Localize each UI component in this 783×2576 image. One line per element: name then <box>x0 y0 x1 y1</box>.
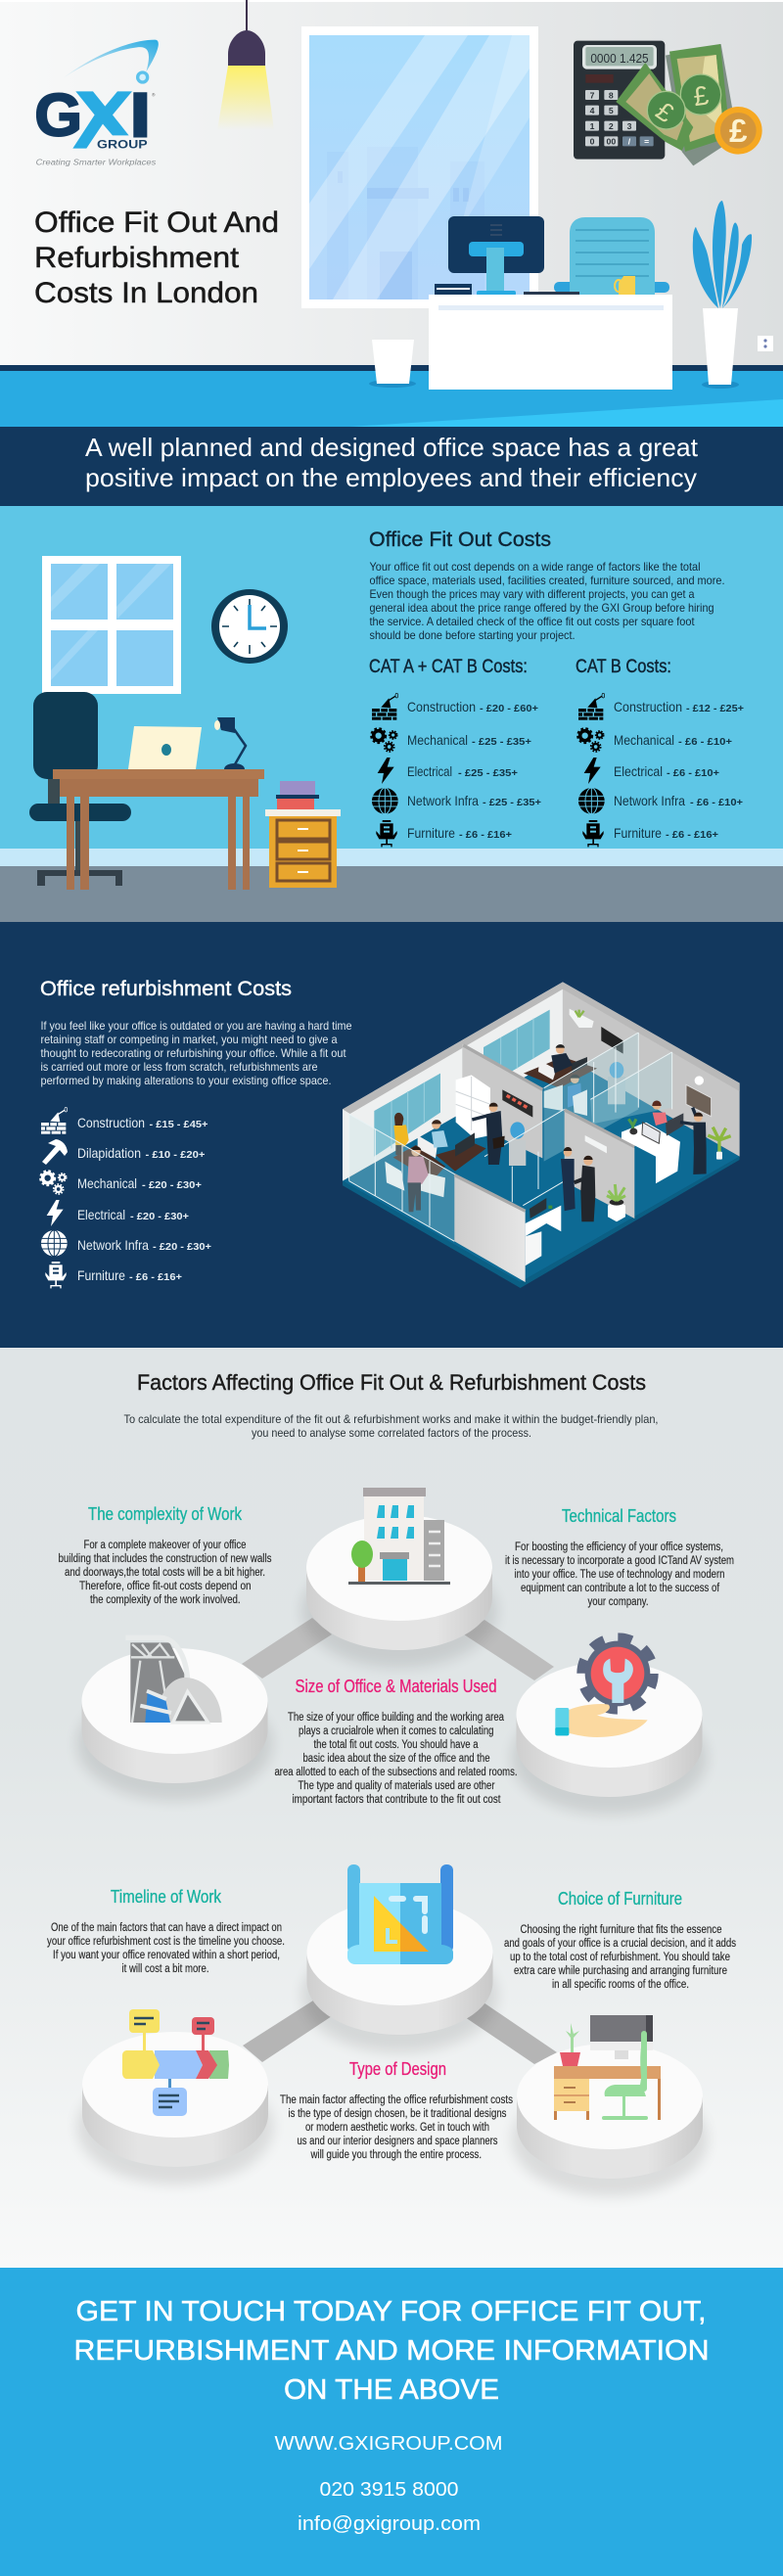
cost rows: - £15 - £45+ <box>149 1119 207 1130</box>
rows column b: Mechanical <box>614 732 674 748</box>
potted plant <box>693 201 752 389</box>
cylinder right <box>511 1662 707 1815</box>
title: Costs In London <box>34 277 258 309</box>
text: technical factors <box>505 1506 734 1608</box>
rows column a: - £25 - £35+ <box>458 767 518 779</box>
calculator with banknotes and coin: / <box>628 137 631 147</box>
upper room workers <box>524 1044 597 1116</box>
text: choice of furniture: up to the total cost of refurbishment. You should take <box>510 1952 730 1963</box>
intro text: To calculate the total expenditure of the fit out & refurbishment works and make it within the budget-friendly plan, <box>123 1412 658 1426</box>
icon: timeline with notes <box>122 2009 229 2116</box>
partition wall a <box>456 1044 542 1158</box>
icon: building <box>348 1488 450 1585</box>
partition wall c <box>454 1174 526 1282</box>
cylinder top two <box>301 1900 497 2052</box>
banner text: positive impact on the employees and their efficiency <box>85 463 697 492</box>
tagline: Creating Smarter Workplaces <box>36 158 157 167</box>
wall socket <box>758 336 773 351</box>
rows column b: - £12 - £25+ <box>686 703 744 714</box>
text: size of office and materials used <box>274 1677 517 1806</box>
paragraph: performed by making alterations to your existing office space. <box>41 1074 331 1087</box>
calculator with banknotes and coin: 5 <box>609 106 614 115</box>
rows column a: Electrical <box>407 763 452 779</box>
call to action <box>74 2296 709 2406</box>
panel: footer contact <box>0 2268 783 2576</box>
cost rows: Mechanical <box>77 1175 137 1191</box>
calculator with banknotes and coin: 1 <box>590 121 595 131</box>
text: technical factors: Technical Factors <box>562 1506 676 1526</box>
contact details: info@gxigroup.com <box>298 2513 481 2535</box>
heading: Office Fit Out Costs <box>369 529 551 551</box>
banner text: A well planned and designed office space has a great <box>85 433 699 462</box>
text: the complexity of work: Therefore, office fit-out costs depend on <box>79 1581 251 1592</box>
rows column b: - £6 - £10+ <box>678 736 732 748</box>
call to action: REFURBISHMENT AND MORE INFORMATION <box>74 2335 709 2367</box>
cost rows: - £20 - £30+ <box>153 1241 211 1253</box>
logo <box>34 40 159 167</box>
desk lamp <box>214 717 246 769</box>
text: the complexity of work: The complexity of Work <box>88 1504 243 1524</box>
text: type of design: will guide you through the entire process. <box>310 2149 482 2161</box>
logo letters: G <box>34 80 82 148</box>
text: type of design: is the type of design chosen, be it traditional designs <box>288 2108 507 2120</box>
water coolers <box>509 1062 625 1166</box>
intro text: you need to analyse some correlated factors of the process. <box>252 1426 531 1440</box>
calculator with banknotes and coin: = <box>644 137 649 147</box>
text: type of design: or modern aesthetic works. Get in touch with <box>305 2122 489 2134</box>
banner text <box>85 433 699 492</box>
ceiling lamp <box>217 0 274 130</box>
back wall decor <box>570 1009 712 1117</box>
diagram one connectors <box>242 1618 554 1680</box>
text: the complexity of work <box>59 1504 272 1606</box>
text: choice of furniture: in all specific rooms of the office. <box>552 1979 689 1991</box>
rows column b: - £6 - £10+ <box>667 767 719 779</box>
icons column a <box>371 693 398 847</box>
cylinder left two <box>77 2032 273 2185</box>
rows column a: Construction <box>407 699 476 714</box>
cat b column <box>576 657 744 847</box>
diagram two connectors <box>243 2001 557 2064</box>
paragraph: thought to redecorating or refurbishing your office. While a fit out <box>41 1046 346 1060</box>
text: timeline of work: One of the main factors that can have a direct impact on <box>51 1922 282 1934</box>
office chair <box>29 692 131 886</box>
calculator with banknotes and coin <box>574 41 762 165</box>
text: technical factors: your company. <box>587 1596 648 1608</box>
icons column b <box>577 693 605 847</box>
yellow mug <box>615 276 635 295</box>
paragraph: If you feel like your office is outdated or you are having a hard time <box>41 1019 352 1033</box>
cost rows <box>77 1115 211 1283</box>
logo letters: I <box>131 80 150 148</box>
panel: office fit out costs <box>0 506 783 922</box>
rows column b <box>614 699 744 841</box>
rows column b: Furniture <box>614 825 662 841</box>
rows column a: - £25 - £35+ <box>483 797 541 808</box>
text: the complexity of work: the complexity of the work involved. <box>90 1594 241 1606</box>
cat a + cat b column <box>369 657 541 847</box>
calculator with banknotes and coin: £ <box>729 114 748 150</box>
text: size of office and materials used: The size of your office building and the working area <box>288 1712 504 1724</box>
intro paragraph: general idea about the price range offered by the GXI Group before hiring <box>370 601 714 615</box>
cost rows: - £10 - £20+ <box>145 1149 206 1161</box>
white cup on floor <box>369 340 416 388</box>
text: technical factors: into your office. The use of technology and modern <box>515 1569 724 1581</box>
calculator with banknotes and coin: 4 <box>590 106 595 115</box>
intro paragraph <box>370 560 724 642</box>
cylinder left <box>76 1648 272 1801</box>
right room desk and workers <box>622 1100 731 1183</box>
cylinder top <box>301 1515 497 1668</box>
intro paragraph: office space, materials used, facilities created, furniture sourced, and more. <box>370 574 724 587</box>
handshake men <box>561 1147 595 1221</box>
front glass wall <box>349 1114 457 1241</box>
cost rows: - £6 - £16+ <box>129 1271 182 1283</box>
laptop <box>128 726 202 769</box>
cost rows: Network Infra <box>77 1237 149 1253</box>
text: choice of furniture: Choosing the right furniture that fits the essence <box>521 1924 722 1936</box>
cost rows: - £20 - £30+ <box>142 1179 202 1191</box>
partition wall b <box>565 1109 634 1219</box>
room window <box>42 556 181 694</box>
text: type of design: us and our interior designers and space planners <box>298 2136 498 2147</box>
text: timeline of work <box>47 1887 285 1975</box>
panel: office refurbishment costs <box>0 922 783 1348</box>
rows column b: Network Infra <box>614 793 685 808</box>
rows column a: Network Infra <box>407 793 479 808</box>
call to action: ON THE ABOVE <box>284 2374 499 2406</box>
rows column a: Mechanical <box>407 732 468 748</box>
calculator with banknotes and coin: 0 <box>590 137 595 147</box>
text: timeline of work: If you want your office renovated within a short period, <box>53 1950 280 1961</box>
text: the complexity of work: building that includes the construction of new walls <box>59 1553 272 1565</box>
glass partitions <box>484 1033 672 1206</box>
text: technical factors: equipment can contribute a lot to the success of <box>521 1583 720 1594</box>
text: timeline of work: your office refurbishment cost is the timeline you choose. <box>47 1936 285 1948</box>
logo letters: GROUP <box>97 138 148 152</box>
text: type of design: The main factor affecting the office refurbishment costs <box>280 2094 513 2106</box>
text: size of office and materials used: basic idea about the size of the office and the <box>303 1753 489 1765</box>
rows column a: - £6 - £16+ <box>459 829 512 841</box>
paragraph: is carried out more or less from scratch, refurbishments are <box>41 1060 318 1074</box>
text: size of office and materials used: important factors that contribute to the fit out cost <box>292 1794 501 1806</box>
rows column b: - £6 - £10+ <box>690 797 743 808</box>
icon: mine tower and conveyor <box>125 1637 222 1723</box>
text: size of office and materials used: plays a crucialrole when it comes to calculating <box>299 1725 493 1737</box>
text: type of design <box>280 2059 513 2161</box>
call to action: GET IN TOUCH TODAY FOR OFFICE FIT OUT, <box>76 2296 707 2327</box>
window with city view <box>301 26 538 308</box>
intro paragraph: Even though the prices may vary with different projects, you can get a <box>370 587 695 601</box>
cat b column: CAT B Costs: <box>576 657 671 677</box>
panel: factors <box>0 1348 783 2268</box>
contact details <box>274 2433 503 2535</box>
calculator with banknotes and coin: 0000 1.425 <box>590 51 649 66</box>
banner <box>0 427 783 506</box>
left room workers and desks <box>385 1103 505 1212</box>
logo swoosh <box>62 40 159 79</box>
contact details: 020 3915 8000 <box>319 2479 458 2501</box>
cost rows: Dilapidation <box>77 1145 141 1161</box>
floor <box>0 365 783 427</box>
wall clock <box>211 589 288 664</box>
isometric office illustration <box>343 982 740 1288</box>
rows column a <box>407 699 541 841</box>
rows column b: Construction <box>614 699 682 714</box>
paragraph: retaining staff or competing in market, you might need to give a <box>41 1033 338 1046</box>
text: size of office and materials used: the total fit out costs. You should have a <box>313 1739 479 1751</box>
text: size of office and materials used: area allotted to each of the subsections and related rooms. <box>274 1767 517 1778</box>
white planter <box>607 1184 625 1221</box>
monitor <box>448 216 544 296</box>
text: choice of furniture: and goals of your office is a crucial decision, and it adds <box>504 1938 736 1950</box>
title <box>34 207 279 309</box>
text: timeline of work: it will cost a bit more. <box>121 1963 209 1975</box>
wooden desk <box>53 769 264 890</box>
paragraph <box>41 1019 352 1087</box>
heading: Office refurbishment Costs <box>40 978 292 1000</box>
rows column a: - £20 - £60+ <box>480 703 538 714</box>
text: type of design: Type of Design <box>349 2059 446 2079</box>
text: the complexity of work: For a complete makeover of your office <box>84 1540 247 1551</box>
text: technical factors: it is necessary to incorporate a good ICTand AV system <box>505 1555 734 1567</box>
cost icons <box>40 1107 68 1288</box>
text: technical factors: For boosting the efficiency of your office systems, <box>515 1541 723 1553</box>
text: choice of furniture <box>504 1889 736 1991</box>
rows column b: Electrical <box>614 763 663 779</box>
title: Refurbishment <box>34 242 240 274</box>
text: size of office and materials used: Size of Office & Materials Used <box>296 1677 497 1696</box>
logo: ® <box>152 91 156 97</box>
cat a + cat b column: CAT A + CAT B Costs: <box>369 657 528 677</box>
intro text <box>123 1412 658 1440</box>
text: choice of furniture: extra care while purchasing and arranging furniture <box>514 1965 727 1977</box>
text: choice of furniture: Choice of Furniture <box>558 1889 682 1909</box>
calculator with banknotes and coin: £ <box>651 96 679 128</box>
office chair back <box>554 217 669 295</box>
rows column b: - £6 - £16+ <box>666 829 718 841</box>
hero panel <box>0 0 783 427</box>
intro paragraph: should be done before starting your project. <box>370 628 576 642</box>
cost rows: - £20 - £30+ <box>130 1211 189 1222</box>
desk items <box>435 284 579 296</box>
drawer cabinet with books <box>265 781 341 888</box>
rows column a: - £25 - £35+ <box>472 736 531 748</box>
calculator with banknotes and coin: £ <box>691 79 711 112</box>
logo letters <box>34 80 150 152</box>
heading: Factors Affecting Office Fit Out & Refurbishment Costs <box>137 1370 646 1395</box>
icon: desk, monitor, chair and plant <box>554 2015 661 2120</box>
cost rows: Electrical <box>77 1207 125 1222</box>
icon: blueprint with set square <box>347 1864 453 1964</box>
text: size of office and materials used: The type and quality of materials used are other <box>298 1780 495 1792</box>
cost rows: Furniture <box>77 1267 125 1283</box>
cylinder right two <box>512 2044 708 2196</box>
intro paragraph: Your office fit out cost depends on a wide range of factors like the total <box>370 560 701 574</box>
title: Office Fit Out And <box>34 207 279 239</box>
rows column a: Furniture <box>407 825 455 841</box>
calculator with banknotes and coin: 3 <box>627 121 632 131</box>
intro paragraph: the service. A detailed check of the office fit out costs per square foot <box>370 615 695 628</box>
text: timeline of work: Timeline of Work <box>111 1887 222 1907</box>
contact details: WWW.GXIGROUP.COM <box>274 2433 503 2455</box>
calculator with banknotes and coin: 00 <box>607 137 616 147</box>
white reception desk <box>429 295 672 390</box>
text: the complexity of work: and doorways,the total costs will be a bit higher. <box>65 1567 265 1579</box>
calculator with banknotes and coin: 2 <box>609 121 614 131</box>
calculator with banknotes and coin: 8 <box>609 90 614 100</box>
calculator with banknotes and coin: 7 <box>590 90 595 100</box>
cost rows: Construction <box>77 1115 145 1130</box>
front small desk <box>526 1198 561 1265</box>
icon: gear with wrench on hand <box>555 1637 654 1737</box>
